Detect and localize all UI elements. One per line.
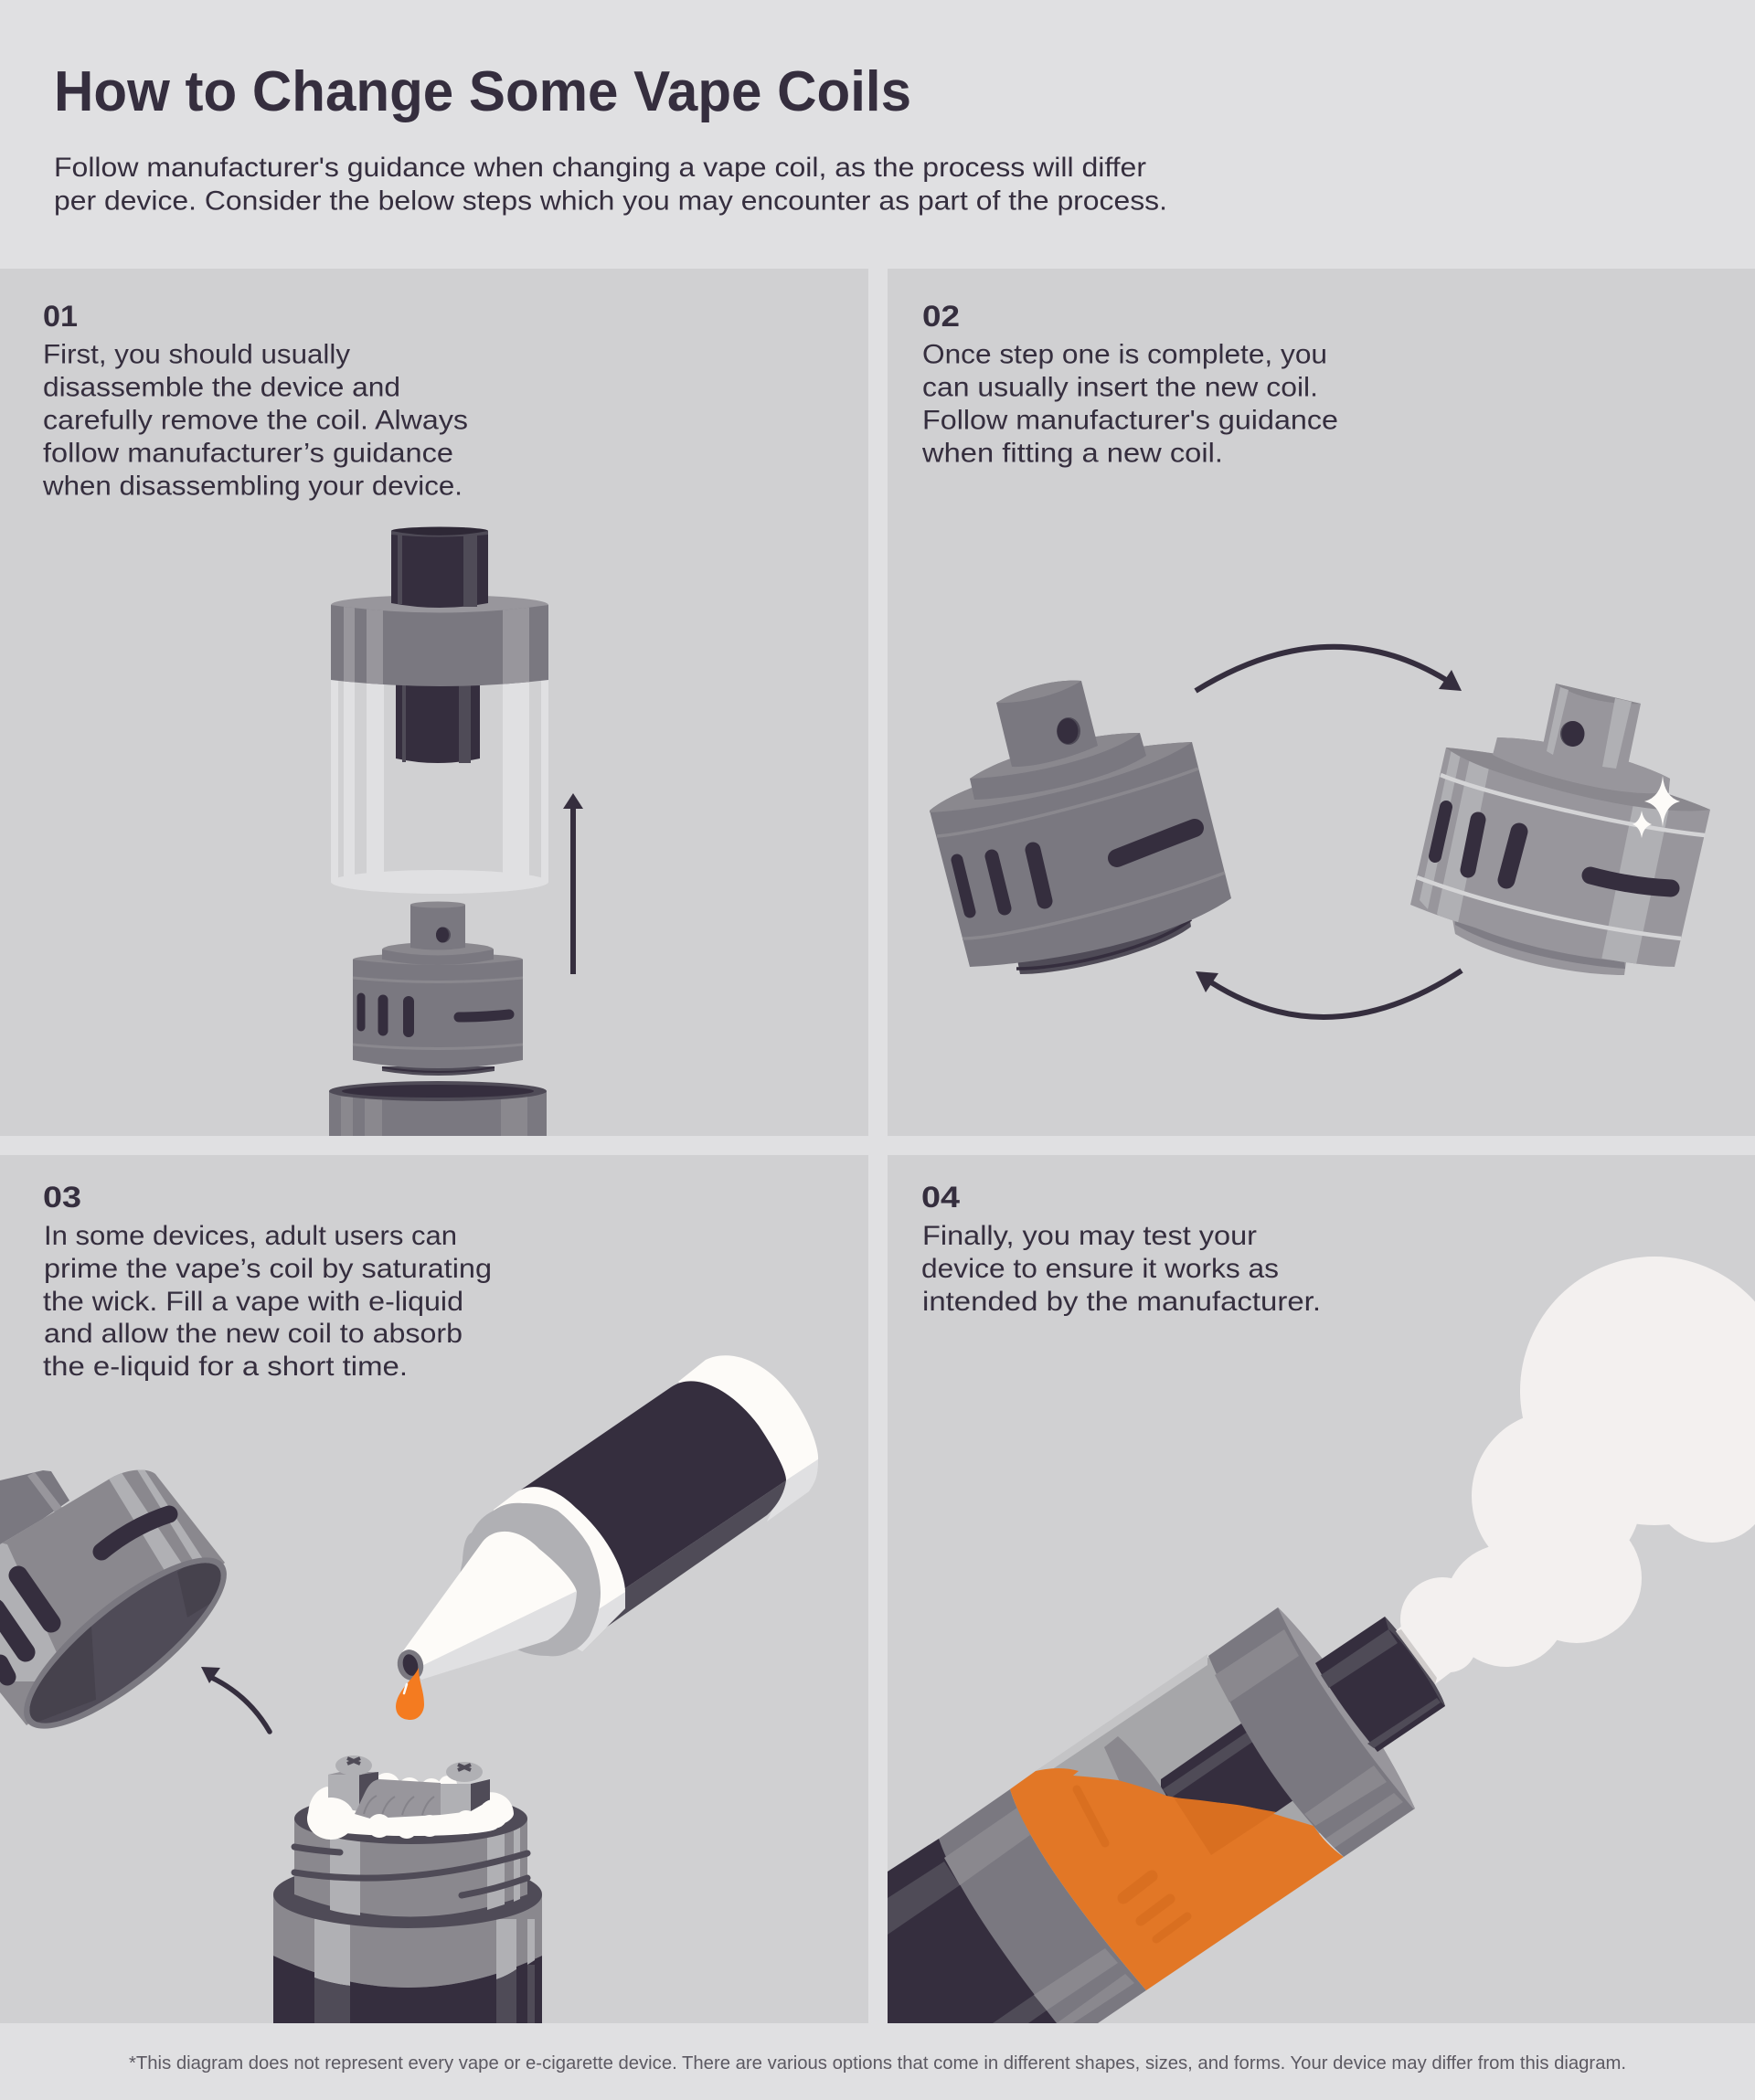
header [54,60,1167,216]
step 01 text: First, you should usually [43,340,350,369]
mouthpiece [391,526,488,608]
step 02 text [921,340,1338,468]
step 01 text: carefully remove the coil. Always [43,406,468,435]
intro text: per device. Consider the below steps which you may encounter as part of the process. [54,186,1167,216]
title: How to Change Some Vape Coils [54,60,911,123]
coil and posts [328,1755,490,1819]
coil [353,901,523,1076]
intro text [54,153,1167,216]
step 03 text: the wick. Fill a vape with e-liquid [43,1287,463,1317]
step 02 number: 02 [922,300,960,333]
icon: removed cap [0,1469,227,1729]
device lower body [273,1876,542,2023]
step 04 text [921,1221,1321,1317]
footnote: *This diagram does not represent every vape or e-cigarette device. There are various options that come in different shapes, sizes, and forms. Your device may differ from this diagram. [129,2053,1626,2073]
vape device [888,1607,1445,2023]
illustration: disassembled vape [329,526,583,1146]
tank cap [331,596,548,686]
step 01 text [42,340,468,501]
step 04 text: Finally, you may test your [922,1221,1257,1251]
step 02 text: Once step one is complete, you [922,340,1327,369]
e-liquid in tank [1010,1768,1344,1990]
illustration group [0,1355,818,2024]
arrow: curved back [1196,970,1462,1017]
step 03 text: In some devices, adult users can [44,1221,457,1251]
arrow: cap lifted away [201,1667,270,1732]
step 01 text: disassemble the device and [43,373,400,402]
footer [0,2023,1755,2100]
inner tube [396,681,480,763]
panel: step 04 [888,1155,1755,2023]
step 01 number: 01 [43,300,78,333]
glass tank [331,676,548,894]
step 03 number: 03 [43,1181,81,1214]
step 04 text: intended by the manufacturer. [922,1287,1321,1317]
illustration: open device with coil [273,1755,542,2024]
intro text: Follow manufacturer's guidance when changing a vape coil, as the process will differ [54,153,1146,183]
step 02 text: can usually insert the new coil. [922,373,1318,402]
vapour cloud [1396,1257,1755,1684]
step 01 text: when disassembling your device. [42,472,463,501]
arrow: curved forward [1196,647,1462,691]
step 01 text: follow manufacturer’s guidance [43,439,453,468]
cotton front [307,1798,508,1840]
icon: e-liquid drop [396,1668,424,1720]
icon: e-liquid bottle [394,1355,818,1683]
step 03 text: and allow the new coil to absorb [44,1319,463,1349]
step 02 text: Follow manufacturer's guidance [922,406,1338,435]
step 03 text: the e-liquid for a short time. [43,1352,408,1382]
step 03 text: prime the vape’s coil by saturating [44,1254,492,1284]
step 04 number: 04 [921,1181,960,1214]
icon: old coil [930,681,1231,974]
step 03 text [43,1221,492,1382]
arrow: up [563,793,583,974]
threads [294,1847,527,1895]
panel: step 02 [888,269,1755,1136]
device base [329,1081,547,1136]
icon: sparkles [1633,776,1680,838]
wick cotton [308,1773,514,1836]
panel: step 01 [0,269,868,1146]
step 02 text: when fitting a new coil. [921,439,1223,468]
panel: step 03 [0,1155,868,2024]
device upper body [294,1806,527,1917]
illustration group [888,1257,1755,2023]
step 04 text: device to ensure it works as [921,1254,1279,1284]
icon: new coil [1410,684,1710,975]
